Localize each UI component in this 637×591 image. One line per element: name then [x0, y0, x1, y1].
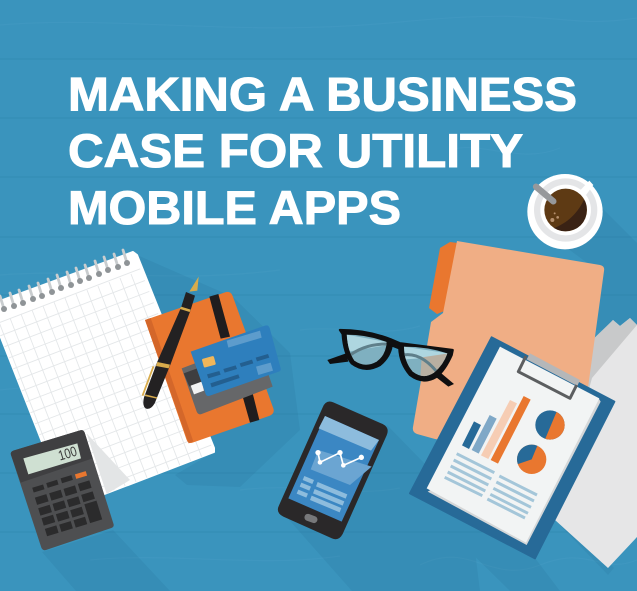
notepad spiral binding: [0, 250, 127, 309]
icon: clipboard with report: [410, 337, 614, 558]
icon: manila folder: [413, 241, 604, 445]
icon: notepad with grid: [0, 248, 215, 495]
icon: eyeglasses: [327, 330, 454, 387]
grid lines: [0, 268, 212, 490]
title: CASE FOR UTILITY: [68, 124, 523, 177]
bar chart: [462, 396, 531, 464]
fountain pen: [142, 277, 199, 409]
title: [68, 68, 577, 234]
report paper: [427, 347, 599, 543]
notebook: [145, 292, 274, 443]
blue card: [191, 325, 281, 396]
icon: smartphone: [278, 402, 388, 539]
metal clip: [518, 353, 580, 398]
icon: sheets of paper: [555, 318, 637, 568]
long shadows cast on the desk: [42, 208, 637, 591]
title: MAKING A BUSINESS: [68, 68, 577, 120]
icon: orange notebook, cards and pen: [142, 277, 281, 443]
report text lines: [445, 454, 537, 518]
icon: coffee cup on saucer: [527, 174, 603, 249]
grey card: [182, 340, 273, 414]
pie chart one: [535, 410, 565, 440]
icon: calculator: [11, 430, 130, 550]
pie chart two: [515, 443, 546, 474]
title: MOBILE APPS: [68, 181, 401, 234]
calculator display value: 100: [56, 443, 79, 464]
